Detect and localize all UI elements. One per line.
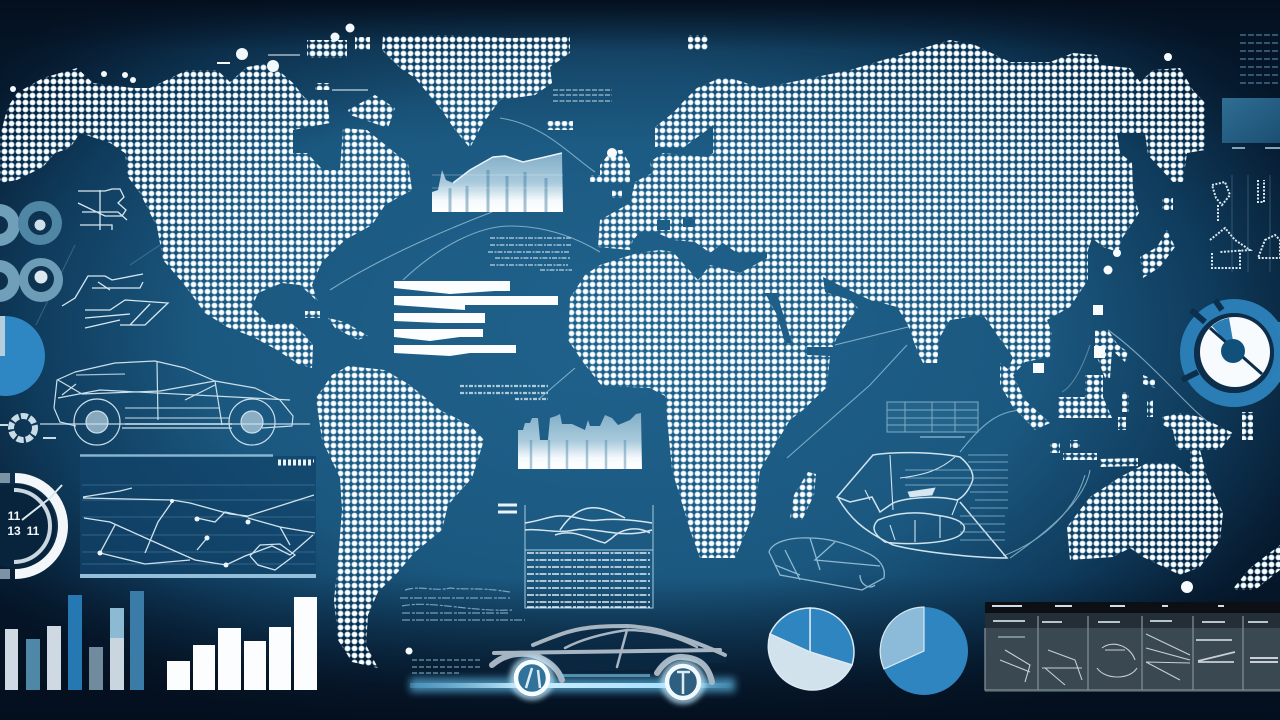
chart: lower area chart: [518, 413, 642, 469]
sheet sketch 1: [998, 637, 1030, 682]
bar chart: mixed blue bars: [5, 591, 144, 690]
chart: wave table: [498, 505, 653, 608]
text block: lower notes: [460, 386, 548, 399]
map: New Guinea: [1162, 413, 1233, 450]
map: Eurasia and Africa: [568, 40, 1205, 558]
pie: three slices: [768, 608, 854, 690]
sketch: wiring diagram: [62, 189, 168, 328]
map: UK and Ireland: [590, 150, 630, 198]
panel: dark sketch sheet: [985, 602, 1280, 692]
map: Japan: [1140, 198, 1175, 278]
gauge: left ring: 11: [27, 524, 40, 538]
sheet sketch 2: [1042, 650, 1082, 685]
map: Australia: [1067, 450, 1223, 575]
text block: wave notes: [400, 588, 525, 620]
map: Arctic islands: [307, 37, 395, 128]
sketch: small car: [769, 538, 884, 590]
bar chart: white bars: [167, 597, 317, 690]
dial 3: [0, 260, 20, 302]
sketch: concept car front: [837, 453, 1008, 558]
dial 4: [19, 258, 63, 302]
map: Cuba and Caribbean: [305, 311, 368, 340]
map: arctic note text: [553, 90, 612, 101]
sheet sketch 5: [1196, 640, 1235, 662]
table: small data grid: [887, 402, 978, 437]
sheet sketch 4: [1146, 634, 1190, 680]
chart: upper area chart: [432, 153, 563, 212]
car: glowing sedan: [406, 626, 735, 701]
map: Greenland: [382, 35, 570, 148]
map: Arctic markers: [10, 24, 368, 92]
chart: horizontal bars: [394, 281, 558, 356]
map: Scattered dotted blocks: [547, 35, 1013, 407]
map: eastern specks: [1232, 412, 1280, 590]
chart: route lines panel: [80, 456, 316, 577]
icon: ring doodle: [0, 416, 56, 440]
map: Philippines: [1095, 330, 1155, 430]
panel: upper-right data: [1222, 35, 1280, 148]
map: Sumatra and Java: [1050, 440, 1138, 467]
sheet sketch 6: [1250, 658, 1278, 662]
gauge: left ring: 13: [7, 524, 21, 538]
map: North America: [0, 63, 412, 368]
gauge: left ring: [0, 478, 63, 574]
dial 2: [18, 201, 62, 245]
sheet sketch 3: [1097, 644, 1137, 677]
gauge readout: 11: [8, 509, 21, 523]
text block: upper notes: [488, 238, 572, 270]
pie: two slices: [880, 607, 968, 695]
map: Madagascar: [790, 472, 816, 520]
icon group: circular dials: [0, 201, 63, 302]
dial 1: [0, 204, 20, 246]
gauge: right target: [1182, 300, 1280, 400]
connection lines: [36, 118, 1212, 558]
pie: left blue: [0, 316, 45, 396]
sketch: right side map fragments: [1210, 175, 1280, 272]
map: island markers: [607, 53, 1193, 593]
map: South America: [316, 366, 484, 668]
car sketch: hatchback: [40, 361, 310, 445]
map: Borneo: [1058, 375, 1112, 418]
